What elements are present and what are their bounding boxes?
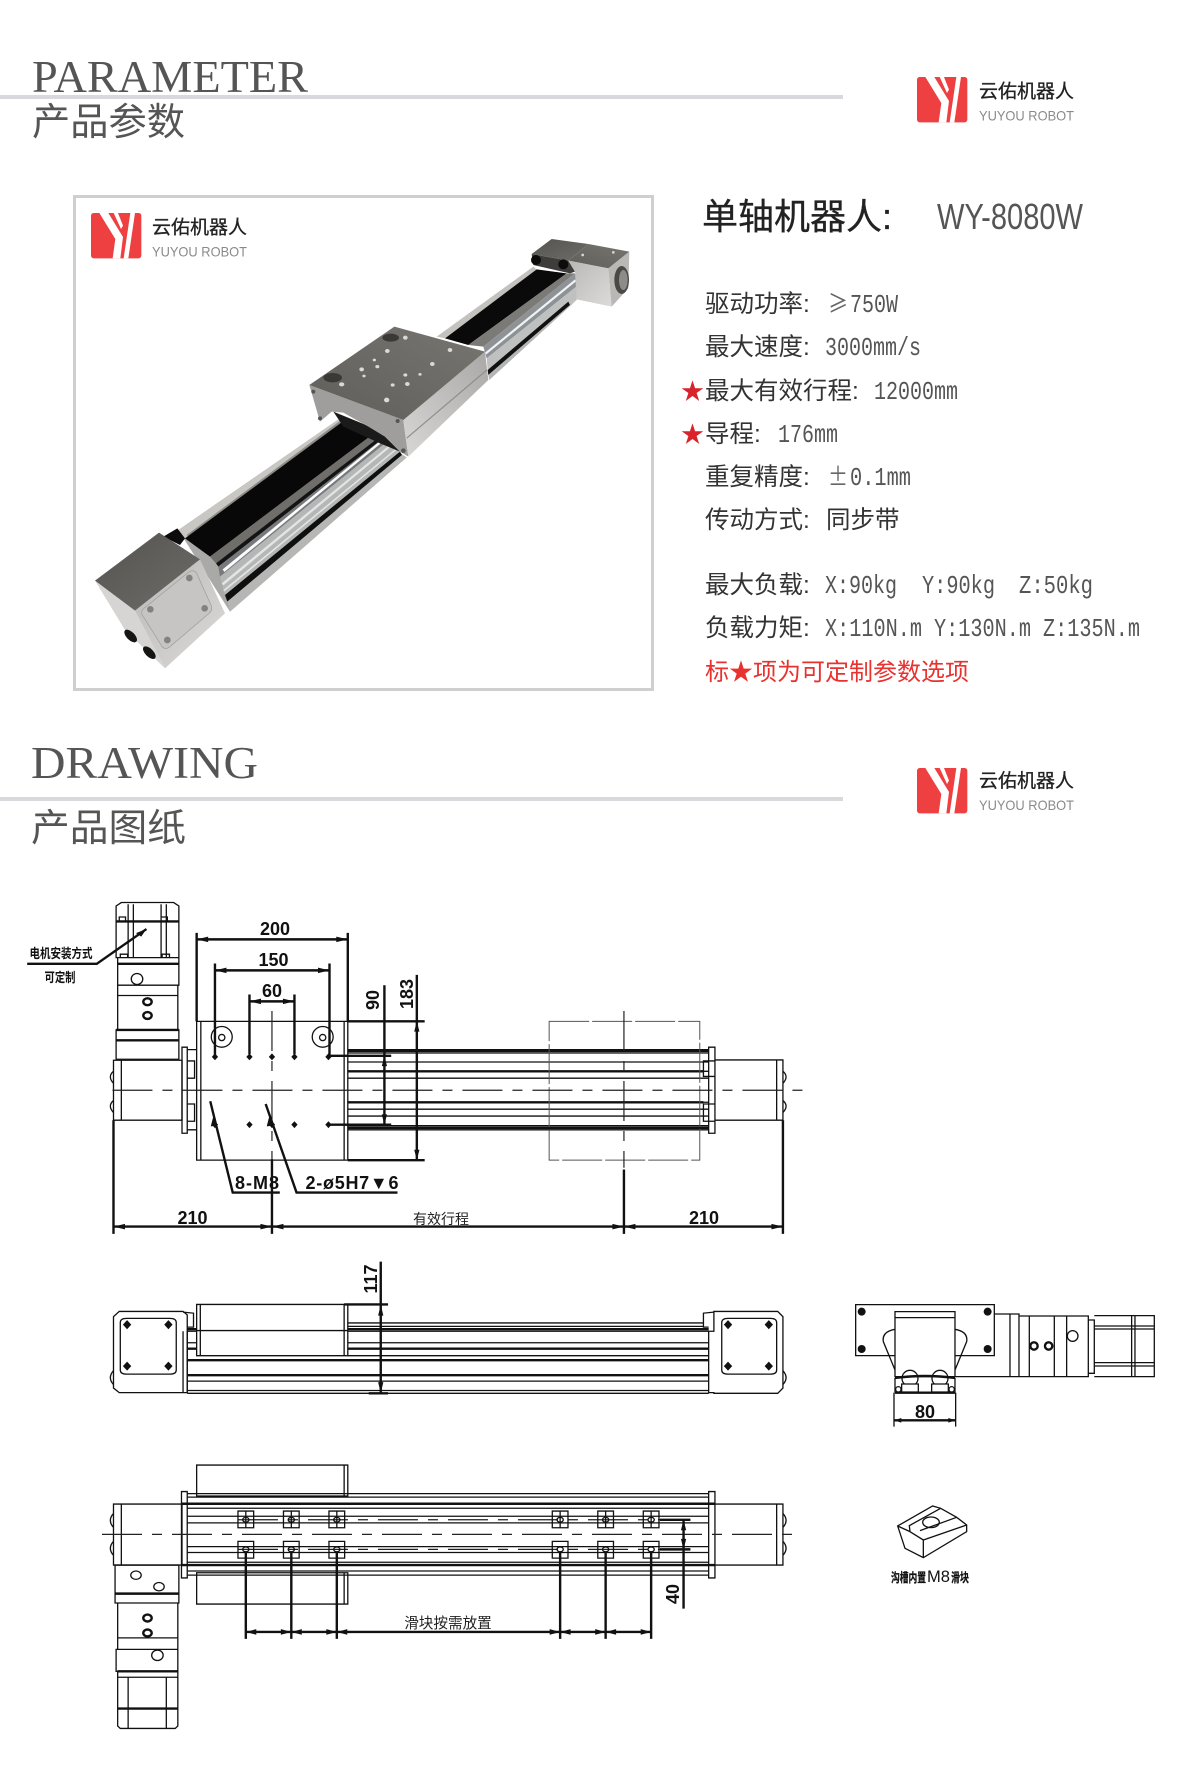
right end block: [531, 239, 629, 307]
spec list: ★: [681, 421, 704, 447]
spec list: 176mm: [778, 420, 838, 450]
logo: top right: [917, 77, 1074, 124]
spec list: 750W: [850, 290, 898, 320]
spec list: 驱动功率:: [705, 290, 810, 318]
heading: PARAMETER: PARAMETER: [32, 52, 308, 102]
logo: drawing section: [917, 768, 1074, 813]
dimension labels: 有效行程: [413, 1211, 469, 1227]
panel: product photo: [74, 196, 652, 690]
dimension labels: 90: [363, 990, 383, 1010]
logo: drawing section: YUYOU ROBOT: [979, 797, 1074, 813]
linear robot axis photo: [95, 239, 629, 668]
drawing: bottom view: [102, 1465, 795, 1728]
dimension: 80: 80: [915, 1402, 935, 1422]
spec list: X:90kg: [825, 571, 897, 601]
dimension labels: 183: [397, 979, 417, 1009]
spec list: 3000mm/s: [825, 333, 921, 363]
dimension labels: 200: [260, 919, 290, 939]
product title: [702, 196, 1083, 237]
heading: PARAMETER: [0, 52, 843, 144]
label: slider placement: 滑块按需放置: [404, 1615, 492, 1632]
spec list: 重复精度:: [705, 463, 810, 491]
heading: DRAWING: DRAWING: [31, 738, 258, 788]
spec list: Z:50kg: [1019, 571, 1093, 601]
label: T-nut: M8: [927, 1567, 950, 1586]
logo: top right: 云佑机器人: [979, 80, 1074, 102]
dimension labels: 210: [689, 1208, 719, 1228]
spec list: 0.1mm: [850, 463, 911, 493]
rail lower section: [178, 416, 407, 612]
heading: PARAMETER: 产品参数: [32, 102, 185, 144]
dimension labels: [30, 919, 719, 1228]
icon: T-nut: [891, 1506, 969, 1586]
product title: 单轴机器人:: [702, 196, 892, 237]
carriage: [309, 327, 488, 457]
left end block: [163, 528, 185, 545]
spec list: 导程:: [705, 420, 761, 448]
spec list: 传动方式:: [705, 506, 810, 534]
logo: top right: YUYOU ROBOT: [979, 108, 1074, 124]
spec list: 12000mm: [874, 377, 958, 407]
heading: DRAWING: [0, 738, 843, 850]
spec list: 最大有效行程:: [705, 377, 859, 405]
dimension labels: 60: [262, 981, 282, 1001]
dimension labels: 2-ø5H7▼6: [306, 1173, 398, 1193]
label: T-nut: 滑块: [951, 1570, 969, 1585]
dimension labels: 8-M8: [235, 1173, 279, 1193]
logo: photo panel: YUYOU ROBOT: [152, 244, 247, 260]
spec list: Z:135N.m: [1043, 614, 1140, 644]
drawing: front view: [110, 1262, 786, 1393]
spec list: 同步带: [826, 506, 900, 534]
spec list: X:110N.m: [825, 614, 922, 644]
label: T-nut: [891, 1567, 969, 1586]
spec list: Y:90kg: [922, 571, 995, 601]
spec list: ±: [828, 457, 848, 492]
dimension lines: [113, 933, 783, 1234]
spec list: 负载力矩:: [705, 614, 810, 642]
dimension: 117: 117: [361, 1264, 381, 1294]
logo: photo panel: [91, 213, 247, 260]
rail upper section: [437, 267, 537, 338]
dimension labels: 150: [258, 950, 289, 970]
drawing: side view: [856, 1305, 1154, 1427]
logo: drawing section: 云佑机器人: [979, 770, 1074, 792]
dimension labels: 电机安装方式: [30, 946, 92, 961]
spec list: ≥: [828, 284, 848, 319]
dimension labels: 210: [177, 1208, 208, 1228]
label: T-nut: 沟槽内置: [891, 1570, 926, 1585]
spec list: ★: [681, 378, 704, 404]
dimension: 40: 40: [663, 1584, 683, 1604]
dimension labels: 可定制: [44, 970, 76, 985]
spec list: 标★项为可定制参数选项: [705, 659, 969, 686]
spec list: 最大速度:: [705, 333, 810, 361]
spec list: 最大负载:: [705, 571, 810, 599]
drawing: top view: [27, 903, 805, 1234]
spec list: Y:130N.m: [934, 614, 1031, 644]
product title: WY-8080W: [937, 196, 1083, 237]
logo: photo panel: 云佑机器人: [152, 216, 247, 238]
spec list: [681, 284, 1140, 686]
heading: DRAWING: 产品图纸: [31, 808, 186, 850]
